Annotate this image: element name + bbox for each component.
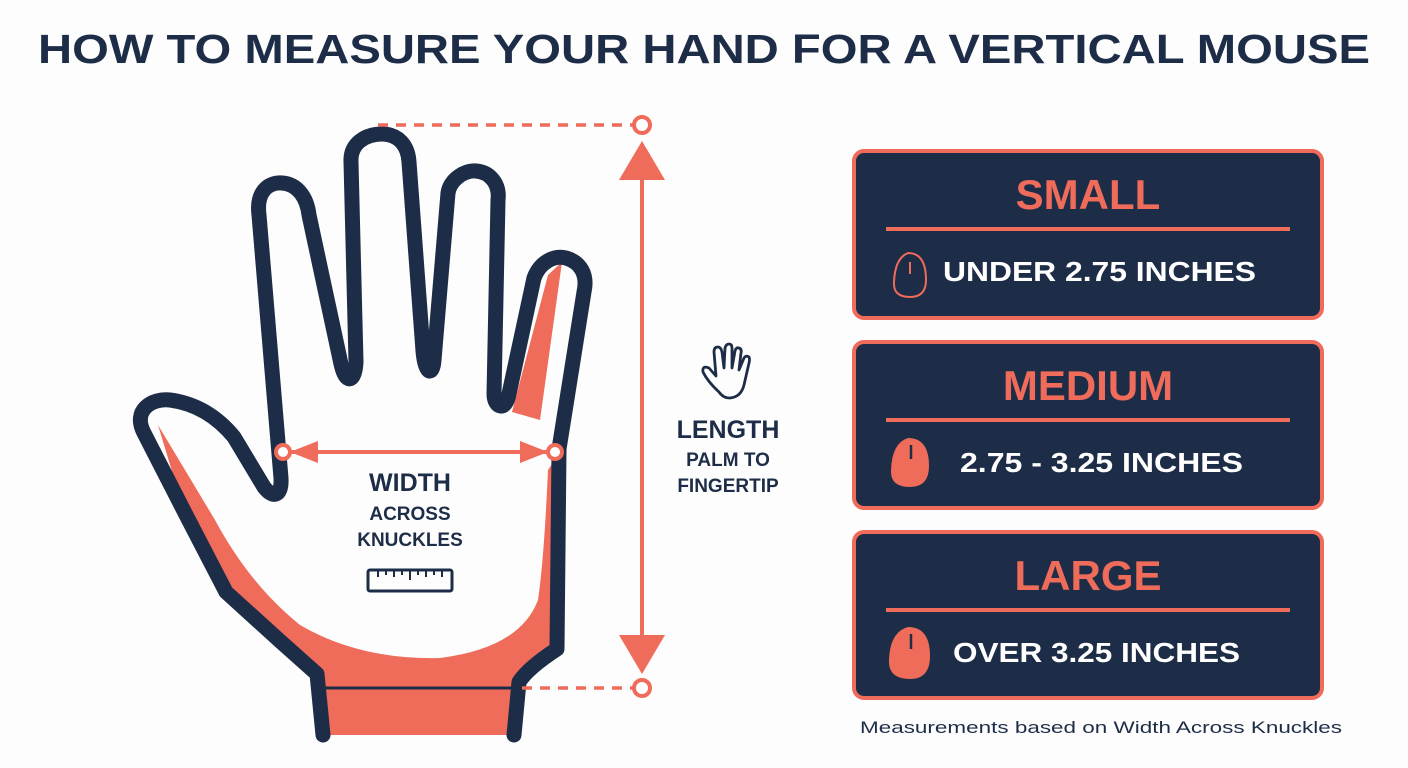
footnote: Measurements based on Width Across Knuckles <box>860 718 1342 737</box>
width label: ACROSS <box>369 504 451 525</box>
card: small: SMALL <box>1016 171 1160 218</box>
coral palm shading <box>158 425 558 735</box>
card: medium: 2.75 - 3.25 INCHES <box>960 447 1243 478</box>
title: HOW TO MEASURE YOUR HAND FOR A VERTICAL MOUSE <box>38 26 1370 72</box>
icon: mouse outline <box>894 253 926 297</box>
length label: FINGERTIP <box>677 476 779 497</box>
card: large: LARGE <box>1014 552 1162 599</box>
width label: WIDTH <box>369 469 451 497</box>
icon: mouse large <box>889 627 930 679</box>
length arrow <box>378 117 665 696</box>
card: large <box>854 532 1322 698</box>
width label <box>357 469 463 551</box>
card: medium <box>854 342 1322 508</box>
width label: KNUCKLES <box>357 530 463 551</box>
icon: hand <box>703 344 750 398</box>
card: small: UNDER 2.75 INCHES <box>943 256 1256 287</box>
length label: PALM TO <box>686 450 770 471</box>
icon: mouse filled <box>891 438 929 487</box>
icon: ruler <box>368 570 452 591</box>
card: small <box>854 151 1322 318</box>
card: medium: MEDIUM <box>1003 362 1173 409</box>
card: large: OVER 3.25 INCHES <box>953 637 1240 668</box>
length label: LENGTH <box>677 416 779 444</box>
width arrow <box>276 441 562 463</box>
hand illustration <box>140 134 585 735</box>
length label <box>677 416 779 497</box>
